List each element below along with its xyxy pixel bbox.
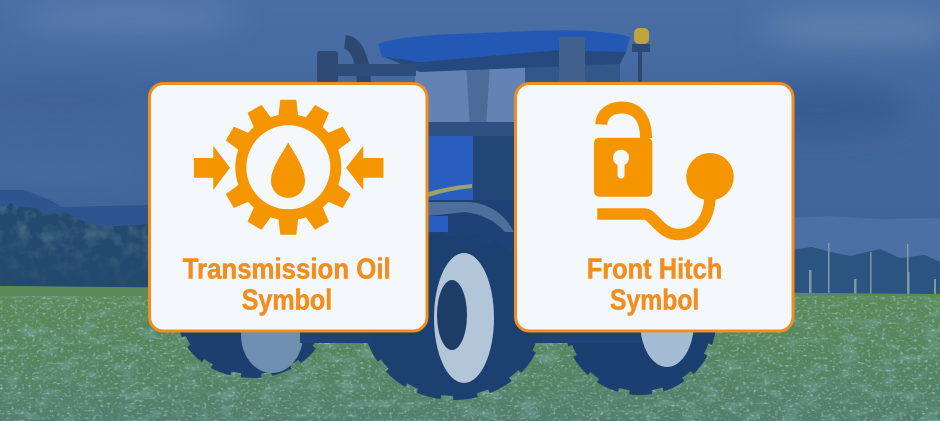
sky <box>0 0 940 240</box>
exhaust <box>345 42 364 84</box>
cab roof <box>378 30 630 62</box>
card panel <box>150 84 427 331</box>
hitch ball <box>686 153 734 200</box>
card: transmission oil symbol <box>150 84 427 331</box>
beacon <box>634 28 649 44</box>
tree line right <box>790 247 940 296</box>
engine grille <box>473 130 514 200</box>
icon: open padlock with hitch ball <box>594 108 734 234</box>
cab window <box>415 60 525 136</box>
rear tyres (far side) <box>182 262 322 374</box>
fence posts <box>809 243 936 302</box>
card: front hitch symbol <box>516 84 793 331</box>
distant hills left <box>0 190 150 230</box>
undercarriage <box>300 255 640 343</box>
main tyre <box>367 236 541 396</box>
label: Front Hitch Symbol: Front Hitch <box>587 253 722 285</box>
grass field <box>0 286 940 421</box>
padlock body with keyhole <box>594 138 652 197</box>
icon: gear with oil drop and arrows <box>194 100 384 235</box>
label: Front Hitch Symbol <box>587 253 722 316</box>
card panel <box>516 84 793 331</box>
tree line left <box>0 200 150 290</box>
label: Transmission Oil Symbol <box>183 253 391 316</box>
left mirror <box>317 51 338 83</box>
gear teeth <box>225 100 352 235</box>
right arrow <box>346 146 384 190</box>
padlock shackle <box>601 108 646 138</box>
oil drop <box>271 142 305 198</box>
fender <box>428 202 514 232</box>
label: Transmission Oil Symbol: Transmission Oil <box>183 253 391 285</box>
tractor <box>182 28 712 396</box>
clouds <box>0 4 940 184</box>
front blue panel <box>428 216 448 232</box>
distant hills right <box>790 216 940 262</box>
label: Front Hitch Symbol: Symbol <box>610 284 699 316</box>
right mirror <box>559 37 585 83</box>
hood <box>428 135 473 200</box>
hitch cable <box>597 195 710 234</box>
left arrow <box>194 146 230 190</box>
fender shadow block between cards <box>428 195 514 255</box>
label: Transmission Oil Symbol: Symbol <box>242 284 332 316</box>
hood stripe <box>428 184 472 197</box>
